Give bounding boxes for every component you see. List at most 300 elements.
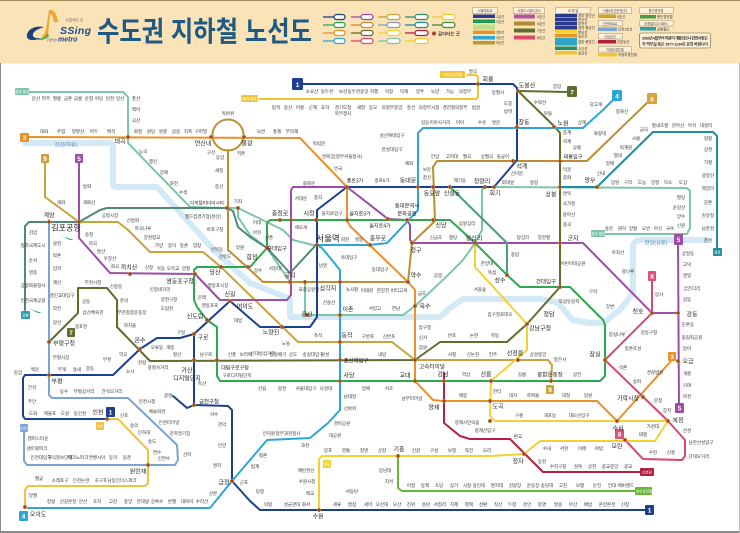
line badges: 분당 — [324, 462, 331, 466]
minor station labels: west: 호구포 — [95, 478, 107, 484]
minor station labels: east: 상계 — [578, 119, 586, 126]
minor station labels: west: 역촌 — [237, 150, 245, 157]
legend: operator tables: 1호선 — [496, 14, 504, 19]
minor station labels: east: 둔전 — [593, 482, 601, 488]
major station labels: 까치산 — [121, 264, 138, 272]
minor station labels: centre: 망월사 — [492, 89, 505, 96]
minor station labels: west: 문학경기장 — [170, 430, 190, 437]
major station labels: 부평 — [51, 378, 63, 386]
icon: airplanes at airports — [30, 236, 74, 313]
minor station labels: centre: 신대방삼거리 — [251, 350, 275, 357]
minor station labels: west: 강매 — [160, 169, 168, 176]
major station labels: 창동 — [518, 118, 530, 126]
line: 6 — [228, 98, 652, 282]
minor station labels: west: 남구로 — [200, 351, 212, 358]
minor station labels: east: 별내 — [614, 152, 622, 159]
minor station labels: west: 임학 — [53, 265, 61, 272]
minor station labels: east: 야탑 — [595, 445, 603, 452]
minor station labels: west: 경인교대입구 — [50, 292, 74, 299]
legend: operator tables: 2호선 — [496, 19, 504, 24]
major station labels: 신설동 — [444, 190, 461, 198]
minor station labels: west: 송도 — [148, 438, 156, 444]
minor station labels: west: 신방화 — [127, 217, 139, 224]
minor station labels: centre: 노들 — [282, 341, 290, 346]
logo: SSing new metro: 서울메트로 — [65, 16, 84, 22]
minor station labels: west: 오목교 — [167, 266, 179, 272]
legend: operator tables: 서울9호선운영(주) — [603, 8, 627, 13]
minor station labels: west: 개화산 — [83, 199, 95, 206]
minor station labels: east: 신내 — [597, 170, 605, 177]
line: 1 — [194, 84, 650, 510]
minor station labels: west: 탄현 — [106, 95, 114, 101]
minor station labels: centre: 녹양 — [431, 88, 439, 95]
minor station labels: east: 수내 — [543, 445, 551, 452]
minor station labels: centre: 상월곡 — [481, 153, 493, 160]
minor station labels: west: 화정 — [134, 128, 142, 135]
minor station labels: centre: 압구정 — [419, 324, 431, 331]
minor station labels: west: 상동 — [82, 298, 90, 304]
logo: SSing new metro — [27, 10, 92, 44]
minor station labels: west: 파주 — [42, 95, 50, 102]
line badges: 경춘 — [714, 250, 721, 254]
minor station labels: east: 양원 — [611, 179, 619, 185]
minor station labels: centre: 장승배기 — [270, 351, 286, 358]
minor station labels: west: 등촌 — [180, 242, 188, 248]
minor station labels: east: 용답 — [511, 251, 519, 257]
minor station labels: west: 방화 — [83, 183, 91, 190]
minor station labels: east: 장암 — [553, 83, 561, 89]
minor station labels: east: 천마산 — [672, 122, 684, 129]
minor station labels: centre: 세마 — [364, 501, 373, 508]
major station labels: 석계 — [516, 162, 528, 170]
minor station labels: west: 신연수 — [158, 455, 170, 462]
minor station labels: west: 중동 — [86, 366, 94, 371]
minor station labels: west: 소래포구 — [52, 477, 68, 484]
major station labels: 합정 — [246, 254, 258, 262]
minor station labels: west: 운정 — [85, 95, 93, 101]
minor station labels: east: 직산 — [494, 501, 502, 508]
logo: SSing new metro: new — [47, 38, 58, 44]
line: 2 — [194, 220, 605, 381]
minor station labels: centre: 의정부시청 — [419, 104, 439, 111]
minor station labels: centre: 학동 — [491, 332, 499, 339]
minor station labels: west: 가양 — [155, 242, 163, 249]
major station labels: 가산 — [181, 366, 193, 374]
minor station labels: west: 신목동 — [211, 246, 223, 253]
minor station labels: east: 개포동 — [544, 412, 556, 419]
minor station labels: west: 예술회관 — [149, 408, 165, 415]
major station labels: 선정릉 — [507, 350, 524, 358]
minor station labels: centre: 서빙고 — [369, 305, 381, 312]
minor station labels: centre: 초당 — [435, 482, 443, 488]
minor station labels: east: 온양온천 — [599, 501, 615, 507]
minor station labels: centre: 수유 — [478, 120, 486, 126]
minor station labels: west: 영등포시장 — [208, 282, 228, 288]
minor station labels: west: 대야미 — [181, 498, 193, 505]
line badges: 8 — [650, 274, 654, 280]
minor station labels: east: 상천 — [704, 146, 712, 152]
minor station labels: east — [491, 83, 714, 508]
minor station labels: west: 신중동 — [110, 283, 122, 289]
minor station labels: centre: 덕정 — [385, 88, 393, 95]
minor station labels: west: 운서 — [29, 257, 37, 264]
minor station labels: west: 인천터미널 — [159, 419, 179, 426]
minor station labels: centre: 동두천 — [321, 88, 333, 95]
minor station labels: east: 배방 — [584, 501, 592, 508]
minor station labels: centre: 신논현 — [467, 351, 479, 357]
line badges: 수인 — [97, 424, 103, 428]
minor station labels: west: 공항화물청사 — [21, 282, 46, 289]
minor station labels: centre: 무악재 — [286, 128, 298, 135]
minor station labels: west: 부천종합운동장 — [118, 309, 146, 316]
major station labels: 충정로 — [272, 210, 289, 218]
minor station labels: west: 선학 — [183, 451, 191, 458]
minor station labels: centre: 영통 — [342, 447, 350, 453]
minor station labels: east: 수락산 — [534, 99, 546, 106]
minor station labels: west: 동인천 — [74, 410, 86, 416]
major station labels: 오이도 — [30, 510, 47, 518]
major station labels: 청담 — [543, 312, 555, 318]
minor station labels: centre: 미아사거리 — [430, 119, 450, 126]
major station labels: 모란 — [611, 444, 623, 450]
legend: operator tables: 일산선 — [578, 34, 587, 38]
minor station labels: east: 이매 — [578, 445, 586, 452]
line badges: 9 — [43, 156, 47, 163]
legend: operator tables — [472, 8, 674, 57]
legend: operator tables: 의정부경전철 — [618, 52, 637, 57]
minor station labels: west: 신정 — [145, 264, 153, 270]
minor station labels: centre: 언주 — [489, 351, 497, 358]
minor station labels: centre: 내방 — [378, 351, 386, 358]
minor station labels: centre: 압구정로데오 — [488, 311, 512, 318]
minor station labels: centre: 신이문 — [511, 170, 523, 177]
minor station labels: east: 광나루 — [622, 268, 634, 275]
minor station labels: east: 국수 — [666, 226, 674, 232]
minor station labels: east: 전대·에버랜드 — [608, 482, 634, 489]
notice box: 각 역무실 혹은 1577-1234로 문의 바랍니다 — [642, 40, 708, 46]
minor station labels: west: 능곡 — [139, 149, 147, 155]
minor station labels: east: 공릉 — [573, 145, 581, 150]
minor station labels: centre: 역삼 — [462, 371, 470, 378]
minor station labels: centre: 신갈 — [412, 447, 420, 453]
major station labels: 삼각지 — [320, 284, 336, 292]
minor station labels: east: 하계 — [563, 138, 571, 145]
minor station labels: east: 신흥 — [667, 449, 675, 455]
minor station labels: west: 초지 — [93, 498, 101, 505]
major station labels: 상봉 — [545, 190, 557, 198]
minor station labels: east: 명일 — [683, 272, 691, 278]
minor station labels: centre: 범골 — [472, 104, 480, 110]
minor station labels: east: 화랑대 — [594, 130, 606, 137]
minor station labels: east: 대성리 — [700, 122, 712, 129]
major station labels: 천호 — [632, 308, 644, 316]
minor station labels: west: 개봉 — [166, 344, 174, 351]
minor station labels: east: 구리 — [624, 179, 632, 186]
major station labels: 선릉 — [480, 370, 492, 378]
minor station labels: east: 경찰병원 — [647, 369, 663, 375]
minor station labels: west: 인하대 — [138, 429, 150, 436]
minor station labels: east: 굴봉산 — [702, 172, 714, 178]
minor station labels: centre: 길음 — [421, 119, 429, 125]
minor station labels: centre: 이태원 — [361, 287, 373, 294]
minor station labels: east: 광교 — [624, 463, 632, 469]
minor station labels: centre: 방배 — [362, 385, 370, 392]
minor station labels: west: 선유도 — [219, 253, 231, 260]
minor station labels: east: 뚝섬유원지 — [559, 298, 579, 305]
line badges: 9 — [548, 387, 552, 394]
minor station labels: east: 둔촌동 — [682, 321, 694, 327]
legend: operator tables: 경춘·중앙선 — [578, 39, 595, 44]
major station labels: 문화공원 — [397, 210, 417, 218]
minor station labels: east: 사가정 — [563, 200, 575, 207]
minor station labels: centre: 경복궁(정부서울청사) — [322, 153, 363, 160]
major station labels: 시청 — [303, 210, 315, 218]
legend: operator tables: 신분당선 — [604, 34, 616, 39]
major station labels: 회룡 — [482, 76, 494, 84]
minor station labels: east: 어린이대공원 — [561, 260, 585, 267]
minor station labels: west: 춘의 — [120, 297, 128, 304]
minor station labels: centre: 의정부중앙 — [382, 104, 402, 111]
minor station labels: east: 구룡 — [515, 413, 523, 419]
major station labels: 정자 — [512, 458, 524, 466]
major station labels: 수서 — [612, 424, 624, 432]
minor station labels: west: 구일 — [177, 329, 185, 336]
legend: operator tables: 수인선 — [578, 46, 587, 51]
minor station labels: west: 신길온천 — [60, 498, 76, 504]
line badges: 공항 — [22, 312, 29, 318]
legend: operator tables: 안산선 — [578, 17, 587, 22]
minor station labels: west: 독바위 — [222, 110, 234, 117]
minor station labels: centre: 청명 — [360, 447, 368, 453]
line badges: 8 — [618, 432, 622, 438]
minor station labels: east: 길동 — [683, 296, 691, 302]
minor station labels: centre: 남성 — [321, 351, 329, 357]
minor station labels: centre: 한양대 — [481, 260, 493, 267]
line badges: 5 — [678, 406, 682, 412]
minor station labels: east: 강촌 — [704, 199, 712, 205]
minor station labels: centre: 쌍문 — [492, 119, 500, 125]
major station labels: 종로3가 — [347, 178, 364, 184]
major station labels: 교대 — [399, 372, 411, 380]
minor station labels: centre: 삼전 — [573, 371, 581, 377]
minor station labels: east: 암사 — [655, 291, 664, 298]
major station labels: 동묘앞 — [424, 190, 441, 198]
minor station labels: east: 산성 — [683, 427, 691, 433]
minor station labels: east: 대모산입구 — [569, 412, 589, 419]
minor station labels: east: 수진 — [649, 449, 657, 456]
minor station labels: centre: 경전철의정부 — [443, 104, 467, 111]
minor station labels: west: 구파발 — [195, 128, 207, 135]
minor station labels: west: 마곡 — [89, 240, 97, 247]
minor station labels: east: 당고개 — [590, 101, 602, 108]
notice box — [640, 33, 710, 48]
minor station labels: west: 동수 — [60, 389, 68, 395]
minor station labels: west: 영등포로 — [202, 302, 218, 308]
major station labels: 을지로3가 — [349, 210, 371, 218]
major station labels: 도곡 — [492, 404, 504, 410]
minor station labels: east: 운동장·송담대 — [527, 482, 553, 489]
minor station labels: centre: 독립문 — [313, 140, 325, 147]
major station labels: 태릉입구 — [563, 152, 583, 160]
legend: operator tables: 3호선 — [496, 30, 504, 34]
minor station labels: west: 갈산 — [53, 319, 61, 325]
minor station labels: centre: 발곡 — [469, 68, 477, 75]
minor station labels: east: 양평 — [629, 225, 637, 231]
minor station labels: west: 인천논현 — [73, 477, 89, 483]
minor station labels: east: 면목 — [563, 190, 571, 197]
header band — [0, 0, 740, 64]
minor station labels: west: 영종 — [29, 269, 37, 275]
minor station labels: centre: 종각 — [314, 194, 322, 201]
minor station labels: west: 청라국제도시 — [21, 242, 45, 249]
minor station labels: centre: 어정 — [407, 482, 415, 489]
minor station labels: east: 수지구청 — [550, 463, 566, 470]
minor station labels: centre: 미아 — [456, 119, 465, 126]
minor station labels: east: 개롱 — [683, 370, 691, 377]
minor station labels: west: 망원 — [236, 244, 244, 250]
minor station labels: west: 보라매 — [240, 351, 252, 358]
minor station labels: east: 백양리 — [702, 185, 714, 192]
minor station labels: west: 문산 — [32, 95, 40, 101]
minor station labels: centre: 을지로입구 — [322, 210, 342, 217]
minor station labels: centre: 지제 — [450, 501, 458, 508]
line: 2 Seongsu branch — [450, 187, 507, 275]
line badges: 용인경전철 — [636, 488, 652, 494]
minor station labels: centre: 매탄권선 — [298, 467, 314, 474]
minor station labels: centre: 의왕 — [264, 501, 272, 508]
minor station labels: west: 역곡 — [119, 351, 127, 358]
minor station labels: east: 남한산성입구 — [689, 439, 713, 446]
minor station labels: centre: 성환 — [479, 501, 487, 507]
line badges: 4 — [22, 514, 26, 520]
line: Bundang — [319, 243, 668, 510]
major station labels: 오금 — [682, 358, 694, 366]
major station labels: 수원 — [312, 512, 324, 520]
legend: operator tables: 경부·경인선 — [578, 13, 595, 18]
minor station labels: centre: 오산대 — [376, 501, 388, 508]
minor station labels: west: 달월 — [29, 492, 37, 499]
minor station labels: centre: 구반포 — [362, 333, 374, 340]
minor station labels: west: 도원 — [61, 410, 69, 416]
minor station labels: centre: 서대문 — [295, 195, 307, 202]
minor station labels: west: 인천대입구 — [31, 454, 51, 461]
minor station labels: west: 지축 — [184, 128, 192, 135]
minor station labels: east: 명지대 — [491, 482, 503, 489]
minor station labels: centre: 상갈 — [378, 447, 386, 453]
minor station labels: east: 일원 — [584, 392, 592, 398]
minor station labels: west: 새절 — [215, 167, 223, 174]
line badges: 3 — [23, 135, 27, 142]
minor station labels: centre: 안암 — [431, 153, 439, 159]
minor station labels: centre: 한성대입구 — [382, 146, 402, 153]
minor station labels: centre: 상왕십리 — [459, 220, 475, 227]
minor station labels: centre: 방학 — [504, 108, 512, 115]
minor station labels: centre: 탑석 — [272, 104, 280, 111]
minor station labels: west: 컨벤시아 — [89, 454, 106, 461]
minor station labels: east: 먹골 — [563, 166, 571, 173]
minor station labels: centre: 신반포 — [383, 333, 395, 339]
major station labels: 한강(하류) — [55, 140, 78, 148]
minor station labels: west: 백석 — [107, 128, 115, 135]
major station labels: 을지로4가 — [369, 222, 391, 230]
river: Han river — [25, 143, 707, 323]
minor station labels: east: 신원 — [677, 222, 685, 228]
title: 수도권 지하철 노선도 — [97, 16, 312, 47]
minor station labels: centre: 회현 — [341, 236, 349, 243]
minor station labels: east: 운길산 — [673, 204, 685, 210]
minor station labels: west: 명학 — [213, 462, 221, 469]
minor station labels: west: 제물포 — [44, 410, 56, 417]
major station labels: 망우 — [584, 176, 596, 184]
major station labels: 영등포구청 — [166, 278, 194, 286]
legend: operator tables: 신분당선 — [617, 39, 629, 44]
minor station labels: west: 군포 — [240, 480, 248, 485]
minor station labels: centre: 보산 — [339, 88, 347, 94]
minor station labels: centre: 신용산 — [323, 299, 335, 305]
major station labels: 군자 — [567, 234, 579, 242]
minor station labels: centre — [251, 68, 581, 508]
minor station labels: west: 백운 — [31, 366, 39, 373]
line badges: 의정부경전철 — [240, 96, 260, 101]
legend: operator tables: 코 레 일 — [568, 8, 578, 13]
minor station labels: east: 아산 — [569, 501, 577, 508]
minor station labels: centre: 당정 — [256, 488, 264, 494]
legend: operator tables: 9호선 — [496, 40, 504, 45]
minor station labels: west: 동암 — [14, 369, 22, 375]
minor station labels: west: 산본 — [209, 490, 217, 496]
minor station labels: east: 단대오거리 — [689, 453, 709, 460]
minor station labels: west: 테크노파크 — [68, 454, 88, 461]
minor station labels: centre: 덕계 — [400, 88, 408, 95]
minor station labels: centre: 북부청사 — [335, 110, 352, 117]
minor station labels: centre: 응봉 — [434, 273, 442, 278]
major station labels: 디지털미디어시티 — [190, 200, 224, 206]
minor station labels: west: 수색 — [179, 189, 187, 196]
minor station labels: west: 금릉 — [74, 96, 82, 101]
minor station labels: centre: 망포 — [324, 447, 332, 453]
major station labels: 금정 — [218, 480, 230, 486]
major station labels: 여의도 — [237, 302, 254, 310]
minor station labels: west: 중앙 — [124, 498, 132, 504]
minor station labels: west: 부천시청 — [85, 279, 101, 286]
minor station labels: centre: 안국 — [334, 165, 342, 172]
minor station labels: west: 계산 — [53, 279, 61, 286]
minor station labels: east: 봉명 — [538, 501, 546, 507]
line badges: 1 — [296, 82, 300, 89]
minor station labels: east: 석촌 — [619, 364, 627, 371]
legend: operator tables: 6호선 — [537, 21, 545, 26]
minor station labels: centre: 서강대 — [269, 265, 281, 272]
minor station labels: west: 간석오거리 — [102, 388, 122, 395]
legend: operator tables: 4호선 — [496, 35, 504, 40]
minor station labels: west: 센트럴파크 — [27, 445, 47, 452]
minor station labels: east: 갈매 — [606, 160, 614, 167]
minor station labels: east: 청평 — [704, 135, 712, 141]
minor station labels: centre: 낙성대 — [320, 385, 332, 392]
minor station labels: east: 퇴계원 — [620, 144, 632, 151]
minor station labels: west: 구로디지털단지 — [223, 372, 251, 379]
line badges: 7 — [570, 90, 574, 96]
minor station labels: west: 철산 — [173, 351, 181, 357]
minor station labels: centre: 진위 — [407, 501, 415, 508]
major station labels: 디지털단지 — [173, 374, 201, 382]
minor station labels: west: 송정 — [85, 231, 93, 237]
minor station labels: centre: 과천 — [301, 442, 309, 449]
minor station labels: centre: 금호 — [418, 291, 426, 296]
minor station labels: west: 양천향교 — [144, 234, 160, 240]
minor station labels: west: 응암 — [216, 154, 224, 160]
major station labels: 용산 — [301, 310, 313, 318]
